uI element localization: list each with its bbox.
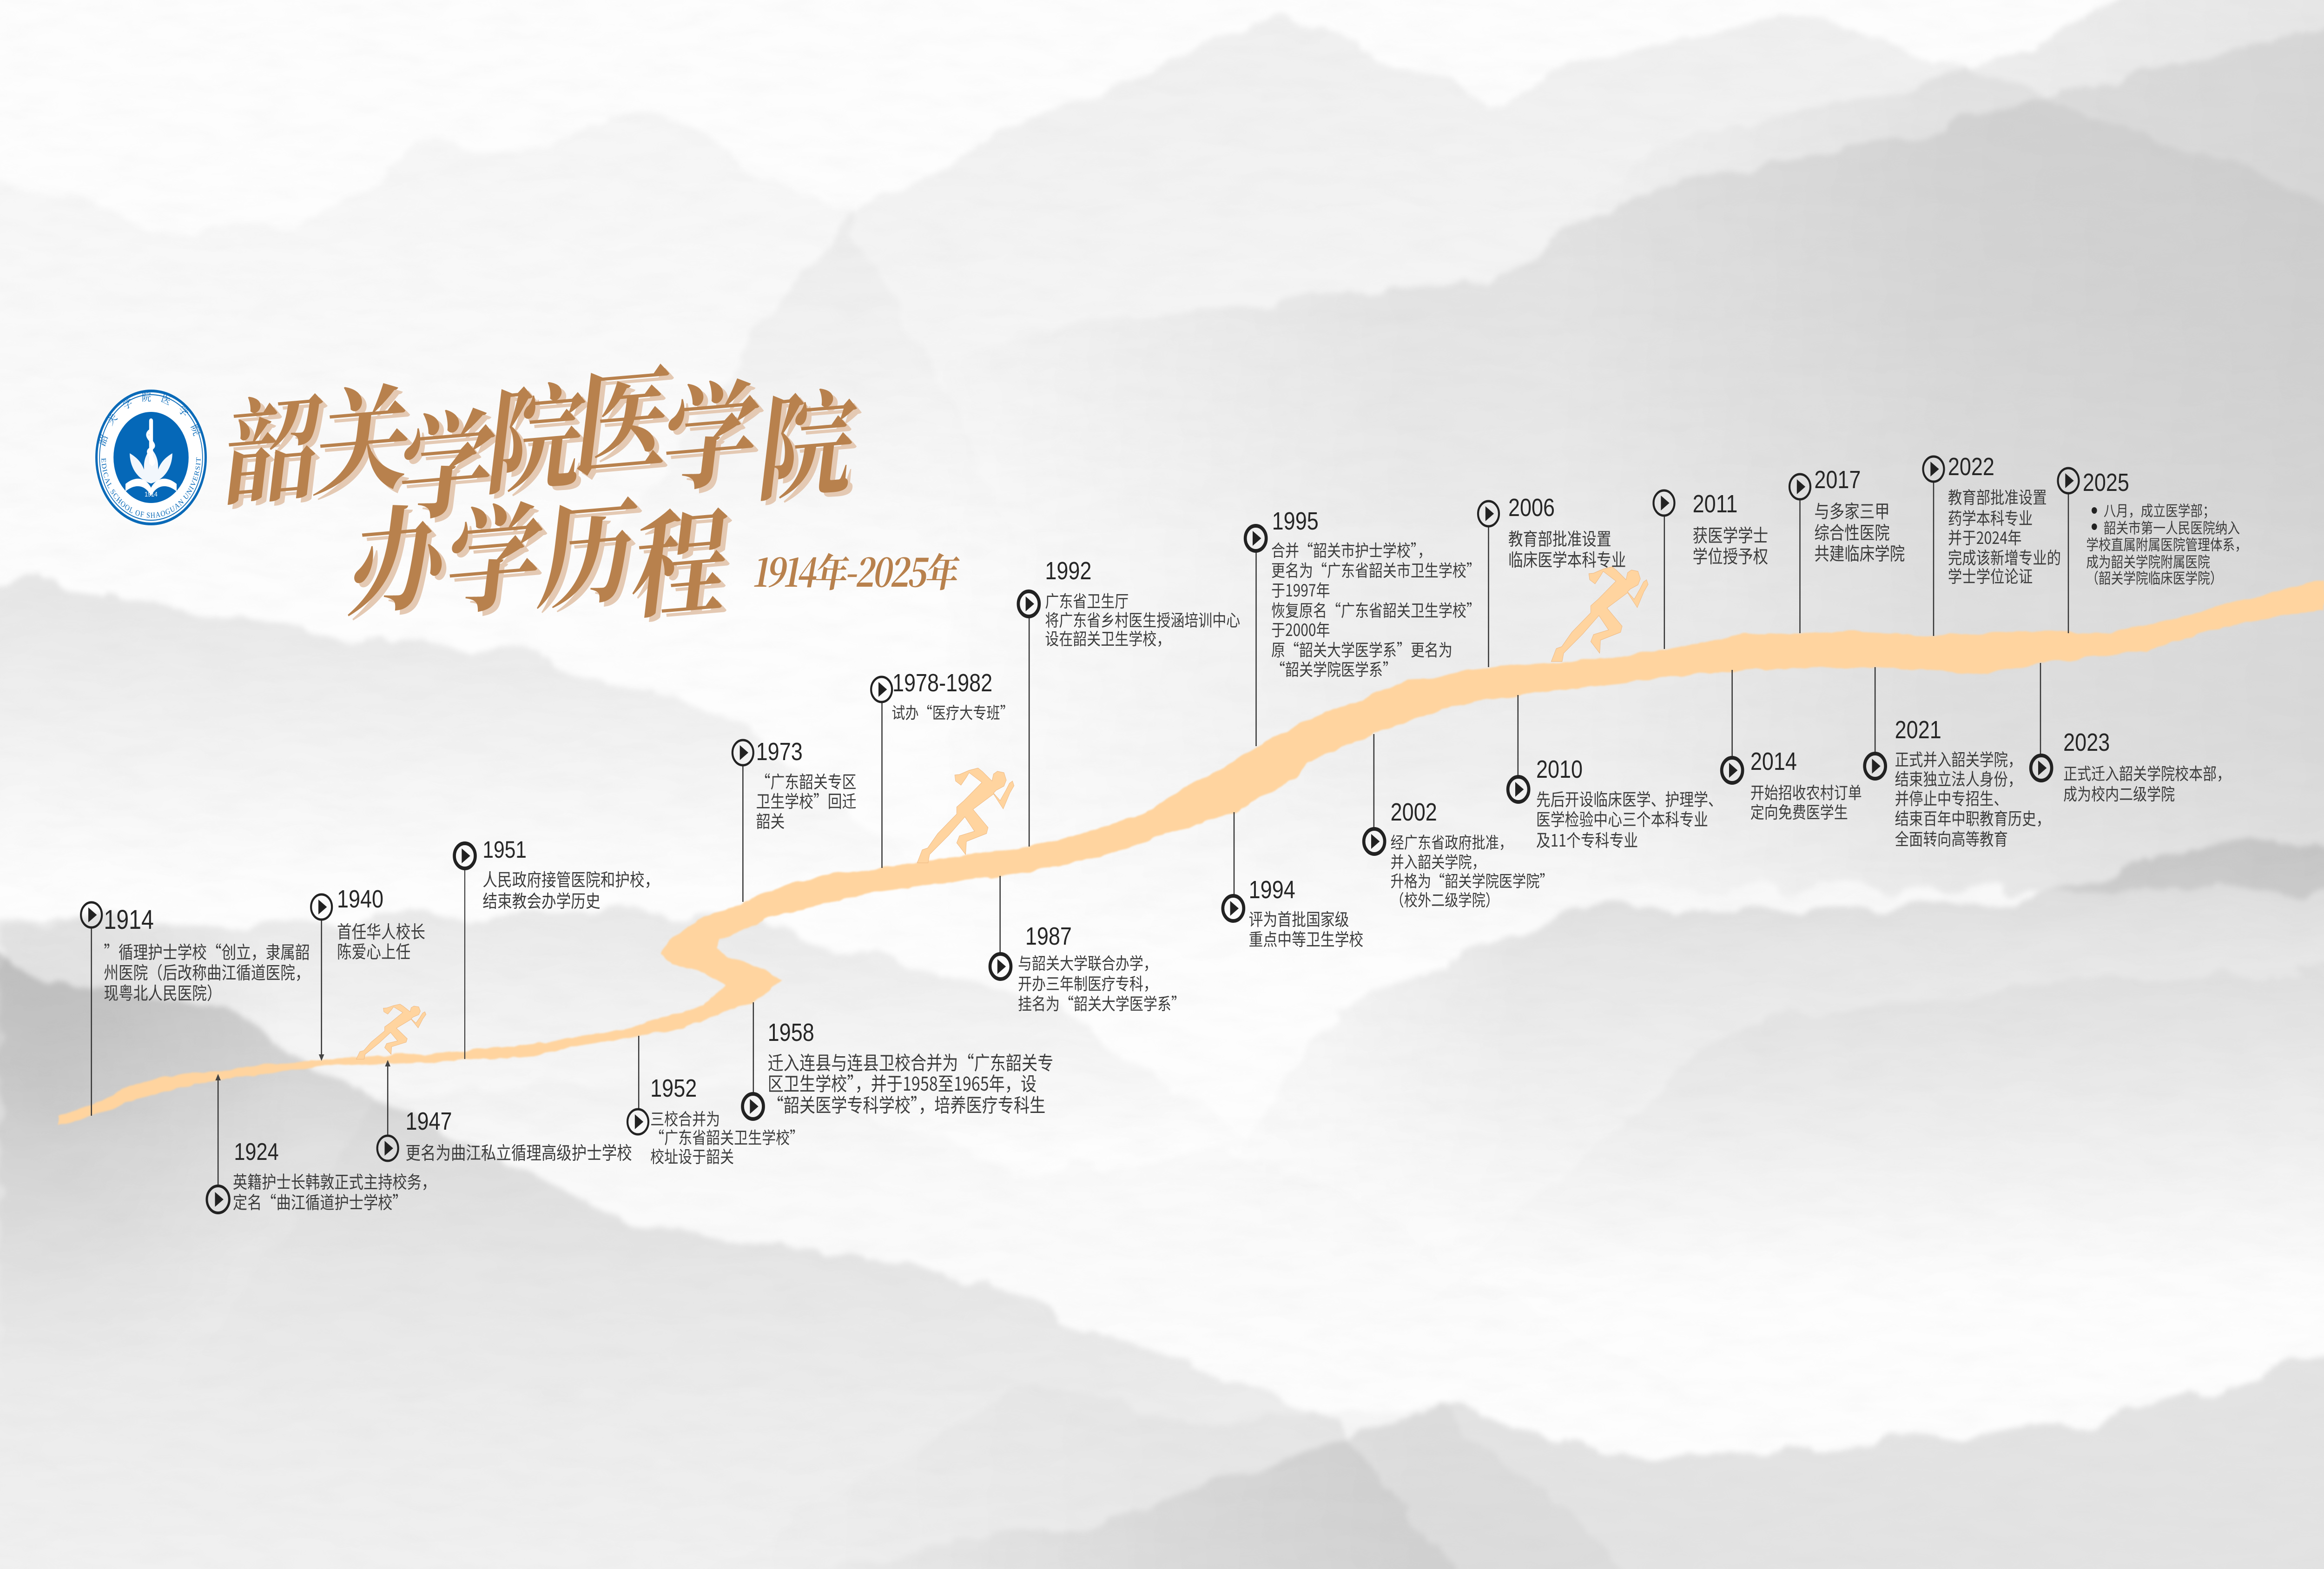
title: 韶关学院医学院办学历程: 办 (347, 469, 468, 643)
milestone 1987: 开办三年制医疗专科， (1018, 971, 1157, 995)
milestone 2021: 并停止中专招生、 (1895, 785, 2008, 810)
milestone 1914 (81, 902, 310, 1116)
milestone 1994: 评为首批国家级 (1249, 906, 1349, 931)
milestone 1995: 更名为“广东省韶关市卫生学校” (1271, 557, 1480, 582)
logo: Medical School of Shaoguan University: 1914 (145, 490, 158, 498)
title: 韶关学院医学院办学历程: 院 (751, 351, 865, 524)
title: 韶关学院医学院办学历程: 学 (438, 464, 553, 638)
milestone 1978-1982 (871, 669, 1014, 868)
milestone 2021: 结束百年中职教育历史， (1895, 805, 2050, 830)
milestone 1947: 更名为曲江私立循理高级护士学校 (406, 1139, 632, 1165)
milestone 1994: 1994 (1249, 875, 1295, 904)
milestone 2021: 2021 (1895, 715, 1941, 744)
milestone 2025 (2058, 468, 2247, 633)
milestone 2011: 获医学学士 (1693, 521, 1768, 548)
milestone 1994: 重点中等卫生学校 (1249, 926, 1363, 951)
title: 韶关学院医学院办学历程: 医 (572, 331, 686, 504)
milestone 1987 (990, 876, 1185, 1015)
milestone 2022 (1923, 452, 2061, 636)
milestone 1924 (207, 1074, 436, 1214)
milestone 1958: 1958 (768, 1018, 814, 1046)
icon: middle runner (917, 768, 1014, 863)
title: 韶关学院医学院办学历程: 关 (308, 346, 422, 519)
milestone 1951: 人民政府接管医院和护校， (482, 866, 659, 892)
milestone 2022: 并于2024年 (1948, 524, 2022, 549)
milestone 2017: 综合性医院 (1814, 518, 1890, 545)
milestone 2010 (1508, 695, 1723, 852)
subtitle: date range: 1914年-2025年 (750, 542, 964, 598)
milestone 1992: 设在韶关卫生学校， (1045, 626, 1170, 650)
milestone 2010: 及11个专科专业 (1536, 827, 1638, 852)
milestone 1940: 陈爱心上任 (337, 938, 410, 964)
milestone 2022: 学士学位论证 (1948, 563, 2033, 588)
title: 韶关学院医学院办学历程: 医 (568, 327, 681, 500)
milestone 1987: 挂名为“韶关大学医学系” (1018, 991, 1185, 1015)
milestone 2011: 学位授予权 (1693, 542, 1768, 569)
milestone 1992: 将广东省乡村医生授涵培训中心 (1045, 607, 1240, 631)
milestone 1924: 1924 (234, 1139, 279, 1165)
title: 韶关学院医学院办学历程: 韶 (222, 360, 336, 533)
milestone 1952: 三校合并为 (650, 1106, 720, 1130)
milestone 1995: 于2000年 (1271, 617, 1330, 641)
milestone 2010: 2010 (1536, 755, 1583, 783)
milestone 2010: 先后开设临床医学、护理学、 (1536, 786, 1723, 811)
title: 韶关学院医学院办学历程: 学 (655, 342, 769, 515)
milestone 1995: 恢复原名“广东省韶关卫生学校” (1271, 597, 1480, 622)
milestone 1987: 1987 (1025, 922, 1072, 950)
title: 韶关学院医学院办学历程: 学 (660, 346, 773, 519)
milestone 2023: 正式迁入韶关学院校本部， (2063, 761, 2231, 785)
milestone 2006: 2006 (1508, 493, 1555, 522)
milestone 2023: 成为校内二级学院 (2063, 781, 2175, 805)
milestone 2025: 成为韶关学院附属医院 (2086, 550, 2210, 572)
milestone 2014 (1722, 670, 1862, 823)
milestone 1978-1982: 1978-1982 (892, 669, 992, 697)
milestone 1995: 1995 (1272, 507, 1319, 535)
milestone 1951: 1951 (482, 836, 527, 863)
milestone 2025: 2025 (2083, 468, 2129, 497)
milestone 2021: 全面转向高等教育 (1895, 826, 2008, 850)
logo: Medical School of Shaoguan University: MEDICAL SCHOOL OF SHAOGUAN UNIVERSITY (0, 0, 202, 520)
milestone 1958 (743, 1002, 1053, 1119)
milestone 1973 (733, 737, 856, 902)
milestone 2014: 开始招收农村订单 (1750, 780, 1862, 804)
milestone 1952: 1952 (650, 1074, 697, 1102)
milestone 2021: 正式并入韶关学院， (1895, 746, 2022, 771)
title: 韶关学院医学院办学历程: 关 (312, 350, 427, 523)
milestone 1958: 迁入连县与连县卫校合并为“广东韶关专 (768, 1047, 1053, 1075)
milestone 2025: 韶关市第一人民医院纳入 (2104, 516, 2240, 538)
milestone 2017: 与多家三甲 (1814, 497, 1890, 523)
milestone 1951: 结束教会办学历史 (482, 887, 601, 913)
milestone 2021: 结束独立法人身份， (1895, 766, 2022, 790)
milestone 1914: 1914 (104, 905, 154, 935)
milestone 1994 (1223, 812, 1363, 951)
milestone 2002: 2002 (1391, 798, 1437, 826)
milestone 1973: 卫生学校”回迁 (756, 788, 856, 813)
milestone 1940: 首任华人校长 (337, 918, 425, 944)
milestone 1952: 校址设于韶关 (650, 1144, 734, 1168)
milestone 1995: 原“韶关大学医学系”更名为 (1271, 637, 1452, 661)
milestone 2014: 定向免费医学生 (1750, 799, 1848, 823)
milestone 2002 (1364, 734, 1553, 911)
title: 韶关学院医学院办学历程: 院 (484, 349, 599, 522)
title: 韶关学院医学院办学历程: 办 (342, 465, 463, 639)
milestone 1958: “韶关医学专科学校”，培养医疗专科生 (768, 1090, 1045, 1118)
milestone 1940 (311, 885, 425, 1061)
milestone 2017: 共建临床学院 (1814, 539, 1905, 566)
milestone 1992: 广东省卫生厅 (1045, 588, 1129, 612)
milestone 1914: ”循理护士学校“创立，隶属韶 (104, 939, 310, 964)
milestone 1958: 区卫生学校”，并于1958至1965年，设 (768, 1068, 1037, 1096)
logo: Medical School of Shaoguan University: 韶关学院医学院 (95, 389, 207, 448)
milestone 1995: “韶关学院医学系” (1271, 656, 1397, 681)
title: 韶关学院医学院办学历程: 学 (443, 469, 557, 642)
milestone 1973: 韶关 (756, 808, 785, 833)
milestone 1987: 与韶关大学联合办学， (1018, 950, 1157, 974)
milestone 2011: 2011 (1693, 490, 1737, 518)
title: 韶关学院医学院办学历程 (217, 327, 870, 646)
milestone 2017: 2017 (1814, 465, 1861, 494)
milestone 1973: “广东韶关专区 (756, 768, 856, 793)
milestone 2014: 2014 (1750, 747, 1797, 775)
title: 韶关学院医学院办学历程: 学 (396, 375, 509, 549)
milestone 2006: 临床医学本科专业 (1508, 546, 1626, 572)
milestone 2025: 八月，成立医学部； (2104, 499, 2215, 521)
title: 韶关学院医学院办学历程: 学 (391, 371, 505, 544)
milestone 2002: 并入韶关学院， (1391, 850, 1486, 873)
milestone 2025: 学校直属附属医院管理体系， (2086, 533, 2247, 555)
milestone 2002: 经广东省政府批准， (1391, 830, 1512, 854)
milestone 2022: 教育部批准设置 (1948, 484, 2047, 509)
milestone 1992 (1018, 556, 1240, 847)
milestone 1924: 英籍护士长韩敦正式主持校务， (233, 1168, 436, 1193)
title: 韶关学院医学院办学历程: 韶 (217, 356, 331, 529)
milestone 1914: 现粤北人民医院） (104, 980, 222, 1005)
milestone 1952: “广东省韶关卫生学校” (650, 1125, 804, 1149)
milestone 1924: 定名“曲江循道护士学校” (233, 1189, 407, 1214)
milestone 1995: 于1997年 (1271, 577, 1330, 602)
milestone 2002: 升格为“韶关学院医学院” (1391, 869, 1553, 892)
milestone 1978-1982: 试办“医疗大专班” (891, 701, 1014, 724)
milestone 2022: 药学本科专业 (1948, 505, 2033, 530)
milestone 1947 (377, 1060, 632, 1165)
milestone 2006: 教育部批准设置 (1508, 525, 1611, 551)
milestone 1973: 1973 (756, 737, 803, 766)
milestone 1947: 1947 (406, 1107, 452, 1135)
title: 韶关学院医学院办学历程: 程 (630, 473, 744, 646)
milestone 2011 (1654, 490, 1768, 649)
milestone 2006 (1478, 493, 1626, 667)
milestone 2023 (2031, 663, 2231, 805)
title: 韶关学院医学院办学历程: 历 (536, 463, 650, 637)
road: winding timeline path (58, 580, 2324, 1125)
title: 韶关学院医学院办学历程: 院 (480, 344, 594, 518)
milestone 2002: （校外二级学院） (1391, 888, 1499, 911)
milestone 2017 (1789, 465, 1905, 633)
milestone 2021 (1865, 667, 2050, 850)
icon: large runner (1552, 567, 1648, 662)
milestone 1992: 1992 (1045, 556, 1091, 585)
title: 韶关学院医学院办学历程: 历 (532, 459, 646, 633)
milestone 1914: 州医院（后改称曲江循道医院， (104, 959, 310, 985)
milestone 2010: 医学检验中心三个本科专业 (1536, 806, 1708, 831)
milestone 1995: 合并“韶关市护士学校”， (1271, 537, 1432, 562)
icon: small runner (356, 1004, 426, 1059)
milestone 1951 (455, 836, 659, 1059)
milestone 1952 (627, 1036, 804, 1168)
title: 韶关学院医学院办学历程: 程 (625, 469, 739, 642)
milestone 2025: （韶关学院临床医学院） (2086, 567, 2223, 588)
milestone 2023: 2023 (2063, 728, 2110, 756)
milestone 1995 (1245, 507, 1480, 746)
milestone 2022: 完成该新增专业的 (1948, 544, 2061, 569)
milestone 1940: 1940 (337, 885, 383, 913)
title: 韶关学院医学院办学历程: 院 (756, 355, 870, 529)
milestone 2022: 2022 (1948, 452, 1994, 481)
